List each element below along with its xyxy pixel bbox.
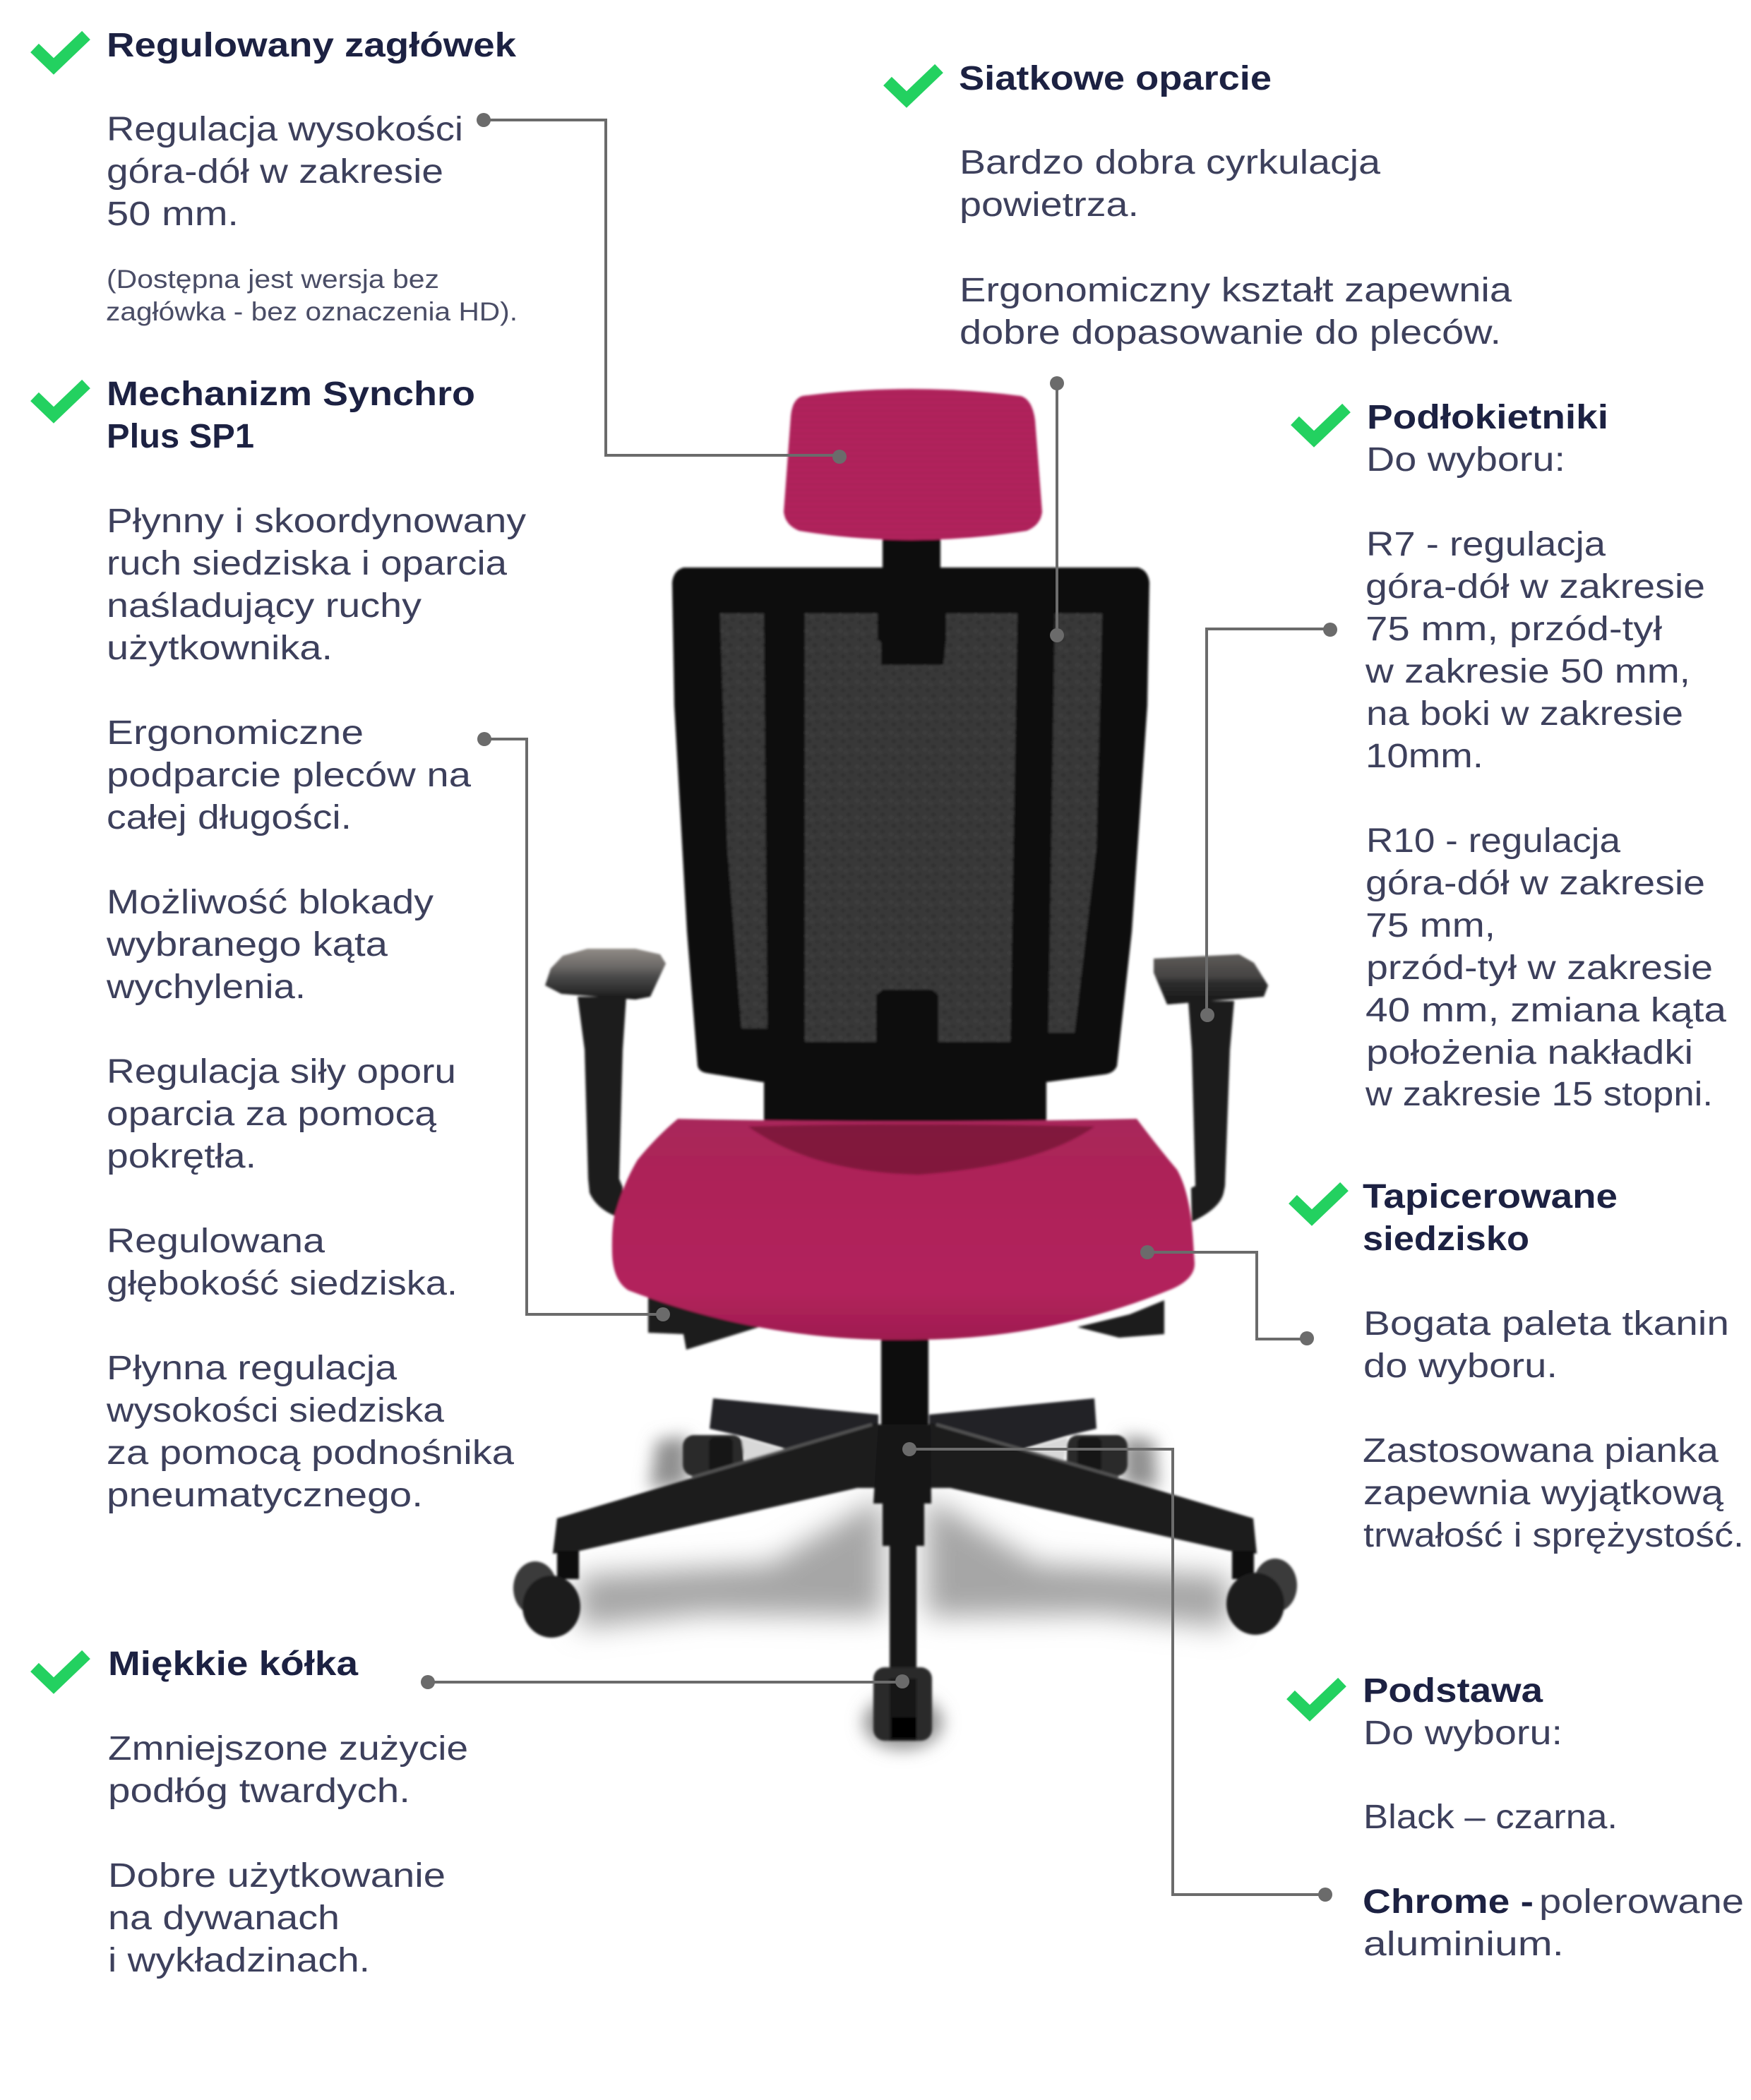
description	[1363, 1715, 1744, 1963]
description: Regulacja siły oporu	[107, 1053, 456, 1091]
description: aluminium.	[1363, 1926, 1564, 1963]
description: 40 mm, zmiana kąta	[1365, 992, 1726, 1029]
description: Bardzo dobra cyrkulacja	[960, 144, 1380, 181]
description: Do wyboru:	[1363, 1715, 1562, 1752]
description: Zastosowana pianka	[1363, 1432, 1719, 1470]
icon: check	[35, 35, 86, 66]
heading	[107, 376, 475, 455]
panel: casters	[35, 1645, 468, 1979]
description: Płynny i skoordynowany	[107, 503, 526, 540]
heading: Regulowany zagłówek	[107, 27, 516, 64]
note: zagłówka - bez oznaczenia HD).	[106, 297, 518, 326]
description: polerowane	[1539, 1883, 1744, 1921]
shadow triangle left	[741, 1437, 789, 1465]
heading: Siatkowe oparcie	[959, 60, 1272, 97]
back connector	[764, 1073, 1046, 1122]
heading: siedzisko	[1363, 1220, 1529, 1258]
description: głębokość siedziska.	[107, 1265, 458, 1302]
icon: check	[1295, 408, 1346, 439]
chair illustration	[513, 389, 1297, 1749]
description: Możliwość blokady	[107, 884, 434, 921]
connector: headrest	[477, 113, 847, 464]
description	[108, 1730, 468, 1979]
rear caster right	[1067, 1435, 1128, 1476]
description: Black – czarna.	[1363, 1799, 1618, 1836]
connector: mesh back	[1050, 376, 1064, 642]
description: Ergonomiczne	[107, 714, 364, 752]
heading: Miękkie kółka	[108, 1645, 358, 1683]
description: wychylenia.	[106, 968, 306, 1006]
headrest post	[883, 536, 940, 572]
headrest	[784, 389, 1042, 540]
base arms	[553, 1398, 1257, 1554]
description: na dywanach	[108, 1900, 340, 1937]
panel: seat	[1293, 1178, 1744, 1554]
floor shadow	[579, 1436, 1229, 1749]
seat rear shadow	[748, 1124, 1094, 1175]
description: przód-tył w zakresie	[1366, 949, 1713, 987]
description: podłóg twardych.	[108, 1772, 410, 1810]
panel: mechanism	[35, 376, 526, 1514]
icon: check	[888, 68, 939, 100]
description: Płynna regulacja	[107, 1350, 397, 1387]
seat mechanism right	[1077, 1300, 1164, 1338]
description: 75 mm, przód-tył	[1365, 611, 1662, 648]
panel: base	[1291, 1672, 1744, 1963]
icon: check	[1291, 1682, 1342, 1713]
heading: Podłokietniki	[1367, 399, 1608, 436]
connector: armrest	[1200, 623, 1337, 1022]
connector: seat	[1140, 1245, 1314, 1345]
heading	[1363, 1178, 1618, 1258]
mesh backrest	[672, 568, 1149, 1082]
description: dobre dopasowanie do pleców.	[960, 314, 1501, 352]
description: 10mm.	[1365, 738, 1483, 775]
description: R7 - regulacja	[1366, 526, 1606, 563]
note	[106, 265, 518, 326]
right armrest	[1154, 954, 1268, 1222]
description: powietrza.	[960, 186, 1139, 224]
icon: check	[35, 384, 86, 415]
caster stems	[557, 1551, 1254, 1579]
seat mechanism left	[648, 1295, 759, 1350]
description: w zakresie 50 mm,	[1365, 653, 1690, 690]
panel: headrest	[35, 27, 518, 326]
description	[1363, 1305, 1744, 1554]
panel: mesh back	[888, 60, 1512, 352]
description: zapewnia wyjątkową	[1363, 1475, 1723, 1512]
description: trwałość i sprężystość.	[1363, 1517, 1744, 1554]
heading: Podstawa	[1363, 1672, 1543, 1710]
note: (Dostępna jest wersja bez	[107, 265, 439, 294]
description: ruch siedziska i oparcia	[107, 545, 507, 582]
panel: armrests	[1295, 399, 1726, 1113]
caster front	[873, 1667, 932, 1741]
left armrest	[545, 949, 666, 1216]
description: podparcie pleców na	[107, 757, 471, 794]
description: Ergonomiczny kształt zapewnia	[960, 272, 1512, 309]
description: Bogata paleta tkanin	[1363, 1305, 1729, 1343]
seat cushion	[612, 1119, 1195, 1340]
description	[107, 111, 463, 233]
mesh panel centre	[805, 613, 1017, 1042]
description: wybranego kąta	[106, 926, 388, 964]
description: Dobre użytkowanie	[108, 1857, 446, 1895]
description	[106, 503, 526, 1514]
heading: Mechanizm Synchro	[107, 376, 475, 413]
heading: Tapicerowane	[1363, 1178, 1618, 1216]
description: Zmniejszone zużycie	[108, 1730, 468, 1768]
description: pokrętła.	[107, 1138, 256, 1175]
description: oparcia za pomocą	[107, 1096, 436, 1133]
caster right	[1226, 1559, 1297, 1635]
description: góra-dół w zakresie	[107, 153, 443, 191]
description	[1365, 441, 1726, 1113]
description: pneumatycznego.	[107, 1477, 423, 1514]
shadow triangle right	[1020, 1437, 1068, 1465]
description: góra-dół w zakresie	[1365, 568, 1705, 606]
description: wysokości siedziska	[106, 1392, 444, 1429]
description: góra-dół w zakresie	[1365, 865, 1705, 902]
description: Chrome -	[1363, 1883, 1534, 1921]
connector: casters	[421, 1674, 909, 1689]
rear caster left	[683, 1435, 743, 1476]
description: w zakresie 15 stopni.	[1365, 1076, 1713, 1113]
description: R10 - regulacja	[1366, 822, 1620, 860]
icon: check	[35, 1655, 86, 1686]
description	[960, 144, 1512, 352]
description: Regulowana	[107, 1223, 325, 1260]
mesh panel right	[1048, 613, 1102, 1033]
description: 75 mm,	[1365, 907, 1495, 944]
connector: mechanism	[477, 732, 670, 1321]
description: 50 mm.	[107, 196, 239, 233]
caster left	[513, 1561, 580, 1638]
heading: Plus SP1	[107, 418, 254, 455]
description: całej długości.	[107, 799, 352, 836]
description: Regulacja wysokości	[107, 111, 463, 148]
description: do wyboru.	[1363, 1348, 1558, 1385]
connector: base	[902, 1442, 1332, 1902]
description: za pomocą podnośnika	[107, 1434, 514, 1472]
description: położenia nakładki	[1366, 1034, 1693, 1072]
description: naśladujący ruchy	[107, 587, 422, 625]
description: i wykładzinach.	[108, 1942, 370, 1979]
mesh panel left	[720, 613, 767, 1028]
description: użytkownika.	[107, 630, 333, 667]
gas column	[881, 1334, 928, 1427]
front leg	[873, 1424, 931, 1667]
icon: check	[1293, 1187, 1344, 1218]
description: Do wyboru:	[1366, 441, 1565, 479]
description: na boki w zakresie	[1366, 695, 1683, 733]
